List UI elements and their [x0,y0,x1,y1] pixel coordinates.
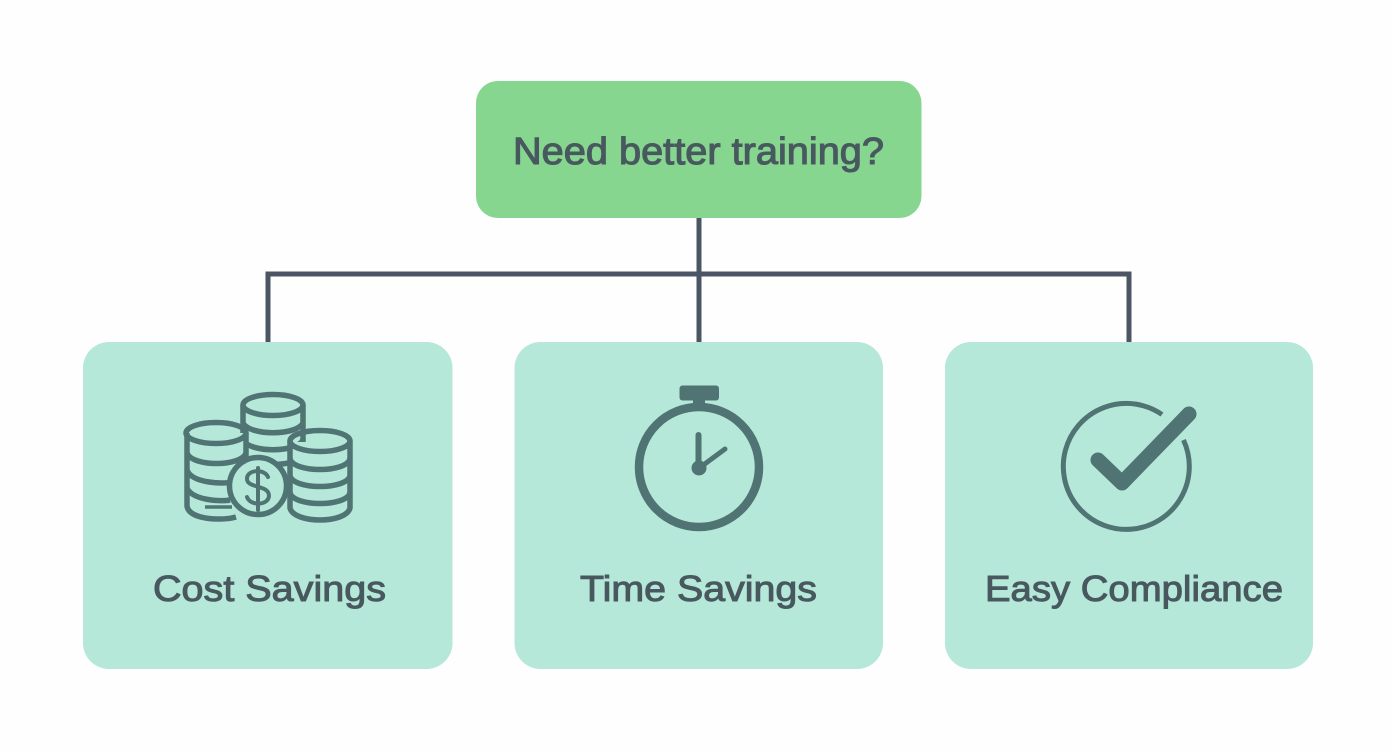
label: time savings: Time Savings [580,568,817,609]
icon part: right coin stack [290,430,350,520]
icon: stacks of coins [186,394,350,520]
icon: check mark in circle [1063,403,1189,529]
panel: time savings [514,342,883,669]
label: easy compliance: Easy Compliance [985,568,1283,609]
top box: question [476,81,922,218]
label: cost savings: Cost Savings [153,568,386,609]
icon part: dollar coin [230,458,286,514]
panel: cost savings [83,342,452,669]
icon: stopwatch [639,386,759,527]
icon part: middle coin stack [243,394,303,470]
connector lines [268,218,1129,342]
icon part: left coin stack [186,422,246,520]
panel: easy compliance [945,342,1313,669]
heading: question text: Need better training? [513,131,884,173]
